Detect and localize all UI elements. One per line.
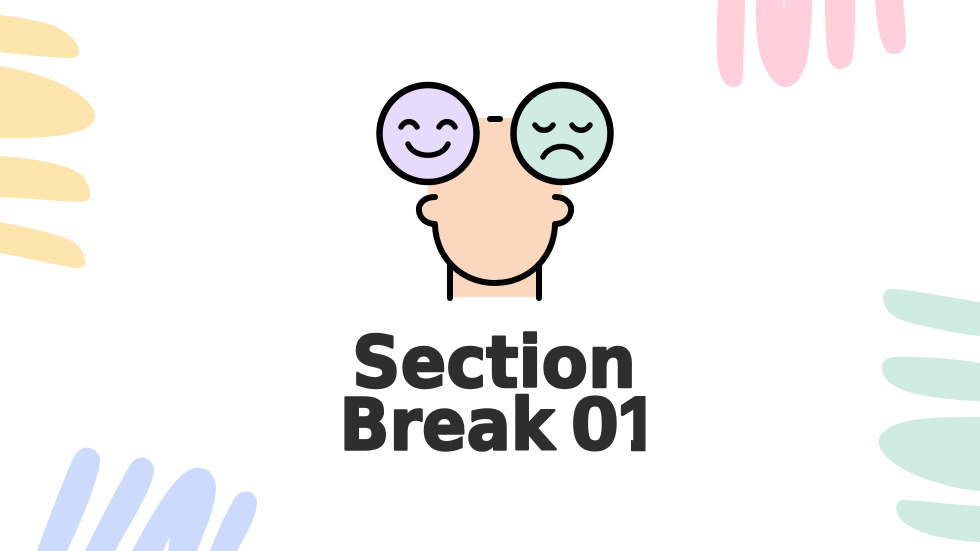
- sad face: [514, 85, 610, 182]
- decoration: yellow brush strokes: [0, 15, 95, 268]
- title: [340, 321, 662, 466]
- icon: head with two mood faces: [380, 85, 610, 298]
- decoration: pink brush strokes: [717, 0, 906, 87]
- decoration: blue brush strokes: [37, 448, 257, 551]
- title: Break: [340, 384, 556, 466]
- decoration: green brush strokes: [879, 289, 980, 542]
- head outline: [419, 119, 571, 298]
- title: 1: [618, 382, 659, 466]
- title: 0: [572, 382, 618, 466]
- happy face: [380, 85, 476, 182]
- title: Section: [352, 321, 636, 404]
- head fill: [420, 118, 570, 297]
